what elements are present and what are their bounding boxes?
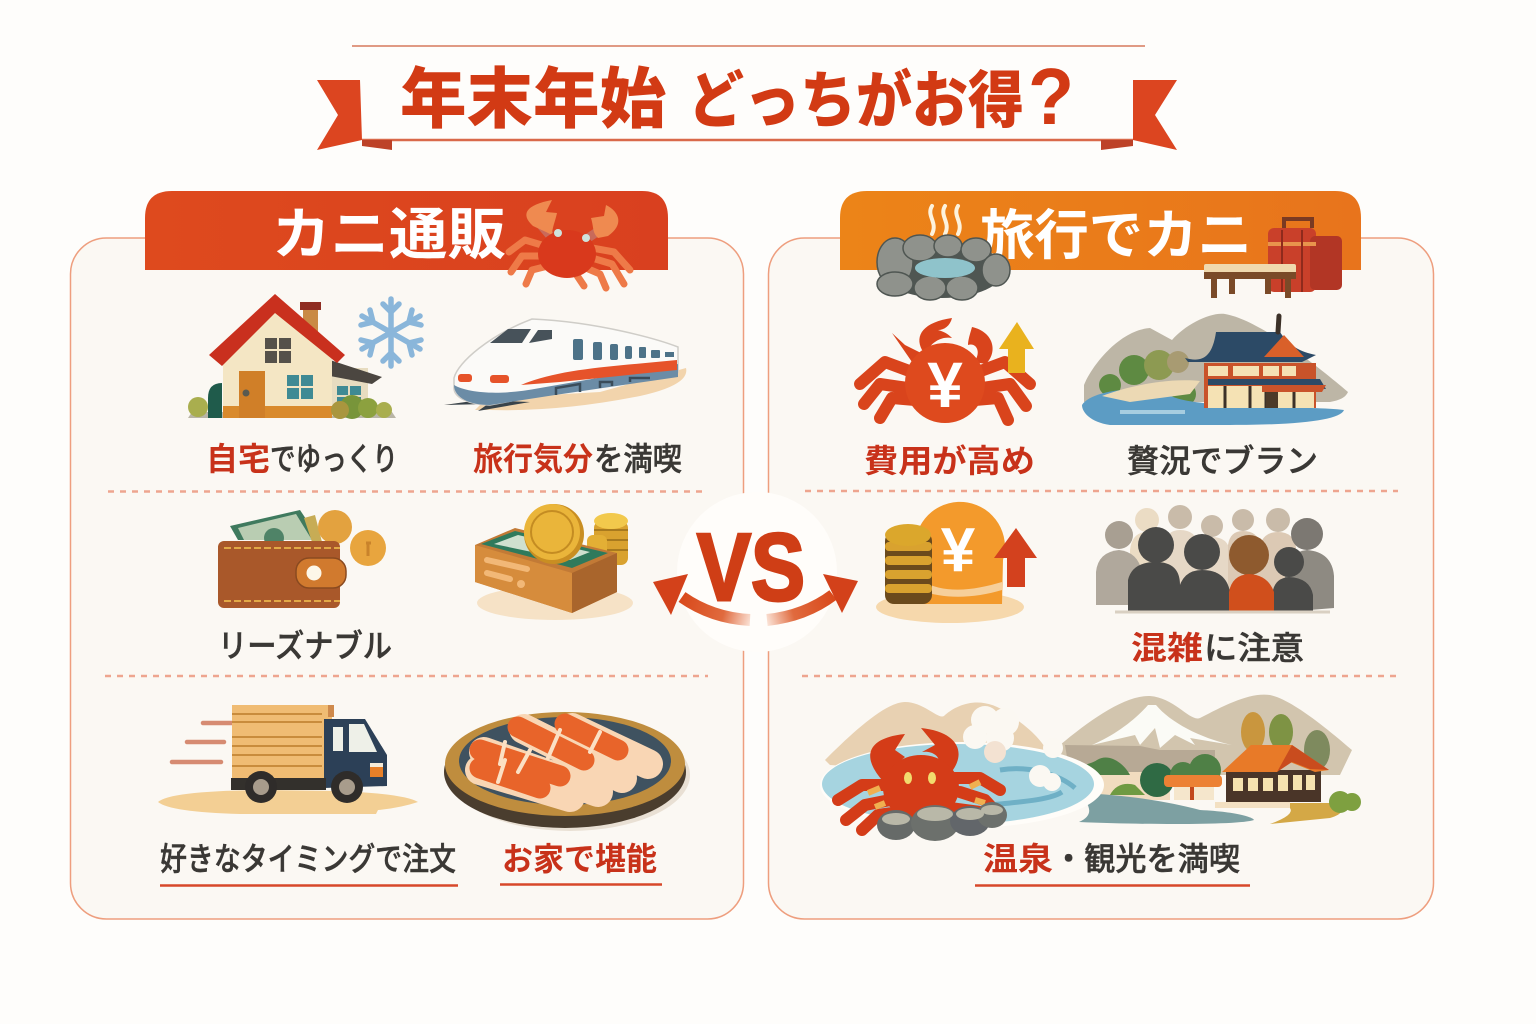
label: リーズナブル: リーズナブル [218, 628, 392, 664]
cab [324, 719, 387, 788]
speed lines [172, 723, 232, 762]
icon: ryokan by a lake [1082, 314, 1348, 425]
panel: 旅行でカニ [768, 191, 1434, 919]
label: 旅行気分を満喫: を満喫 [594, 441, 682, 477]
right claw [591, 205, 618, 238]
right claw [921, 728, 959, 776]
box [475, 528, 617, 613]
box shadow [477, 586, 633, 620]
label: 自宅でゆっくり [206, 441, 398, 477]
icon: coins and yen with arrow: ¥ [941, 516, 976, 585]
left claw [526, 200, 557, 235]
icon: snowflake [361, 299, 421, 366]
chassis [231, 778, 326, 790]
title text [400, 52, 1074, 141]
banknotes [230, 510, 320, 540]
icon: crab on header [509, 200, 630, 288]
sand and path [1078, 772, 1170, 800]
ribbon tail left [317, 80, 362, 150]
small shelter [1164, 775, 1222, 800]
VS text: VS [697, 514, 805, 621]
label: 旅行気分を満喫 [473, 441, 682, 477]
icon: suitcase and low table [1204, 219, 1342, 298]
panel header tab [145, 191, 668, 270]
annex [332, 368, 368, 416]
icon: onsen rocks with steam [877, 206, 1010, 300]
panel heading: カニ通販 [272, 203, 506, 266]
white rim of pond [820, 742, 1104, 828]
label: 温泉・観光を満喫: ・観光を満喫 [1053, 841, 1240, 877]
panel: カニ通販 [70, 191, 744, 919]
wallet body [218, 541, 340, 608]
rising yellow arrow [999, 322, 1034, 373]
ribbon fold right [1101, 140, 1133, 150]
train body [454, 319, 678, 405]
train shadow and track [445, 368, 686, 410]
trees [1072, 712, 1361, 813]
label: 費用が高め: 費用が高め [864, 443, 1035, 479]
label: 自宅でゆっくり: でゆっくり [270, 441, 398, 477]
label: 好きなタイミングで注文: 好きなタイミングで注文 [160, 841, 456, 877]
front brown figure [1229, 535, 1269, 575]
icon: wallet with coins [218, 510, 386, 608]
coin [350, 530, 386, 566]
label: 温泉・観光を満喫 [975, 841, 1250, 886]
title text: ? [1028, 52, 1074, 141]
rocks [877, 802, 1007, 841]
lake [1082, 389, 1344, 425]
icon: onsen and sightseeing scene [820, 695, 1361, 841]
back row [1130, 505, 1296, 612]
ribbon fold left [362, 140, 392, 150]
red stripe [521, 360, 677, 385]
right arc arrow [767, 574, 858, 620]
house body [223, 310, 332, 418]
title banner [317, 46, 1177, 150]
side figures [1096, 518, 1334, 612]
left claw [870, 734, 905, 780]
panel heading: 旅行でカニ [980, 206, 1252, 266]
underline [160, 884, 458, 887]
windscreen [490, 329, 531, 343]
coin [318, 510, 352, 544]
label: 自宅でゆっくり: 自宅 [206, 441, 270, 477]
title text: 年末年始 [400, 62, 666, 136]
pond [822, 744, 1094, 824]
title text: どっちがお得 [688, 66, 1024, 136]
large coin [524, 504, 584, 564]
yen coin [915, 502, 1005, 604]
icon: money box with coins [475, 504, 633, 620]
roof [209, 294, 345, 366]
clasp [296, 558, 346, 588]
lower blue skirt [454, 364, 678, 405]
left claw [919, 318, 952, 350]
icon: crab legs on plate [444, 712, 690, 831]
icon: delivery truck [158, 705, 418, 814]
label: 温泉・観光を満喫: 温泉 [983, 841, 1053, 877]
rising red arrow [994, 528, 1037, 587]
steam [963, 706, 1063, 791]
label: 混雑に注意 [1131, 630, 1304, 666]
chimney [303, 304, 318, 332]
Mt Fuji snow [1092, 705, 1232, 748]
ground shadow [158, 790, 418, 814]
VS badge [653, 492, 858, 652]
right claw [968, 327, 993, 364]
label: 混雑に注意: 混雑 [1131, 630, 1203, 666]
river [1079, 793, 1254, 824]
icon: crab with yen: ¥ [927, 349, 963, 421]
panel header tab [840, 191, 1361, 270]
icon: house with bushes [188, 294, 396, 419]
label: 旅行気分を満喫: 旅行気分 [473, 441, 593, 477]
icon: coins and yen with arrow [876, 502, 1037, 623]
label: 贅況でブラン: 贅況でブラン [1127, 443, 1318, 479]
ribbon tail right [1133, 80, 1177, 150]
front dark figures [1128, 527, 1313, 612]
icon: crowd of people [1096, 505, 1334, 612]
bushes [188, 397, 208, 417]
left mountains [825, 702, 1060, 780]
cargo box [232, 705, 332, 779]
crab in onsen [838, 728, 1000, 830]
label: お家で堪能: お家で堪能 [502, 841, 657, 877]
coin stack [587, 513, 628, 565]
right mountains [1060, 695, 1352, 775]
ryokan building [1185, 316, 1326, 408]
label: 混雑に注意: に注意 [1204, 630, 1304, 666]
underline [500, 883, 662, 886]
underline [975, 884, 1250, 887]
mountains [1084, 314, 1348, 402]
farmhouse [1215, 745, 1329, 808]
coin stack [885, 524, 932, 604]
left arc arrow [653, 574, 750, 620]
icon: bullet train [444, 319, 686, 411]
base [876, 591, 1024, 623]
trees [1099, 350, 1196, 406]
wheels [245, 771, 363, 803]
icon: crab with yen [860, 318, 1034, 423]
